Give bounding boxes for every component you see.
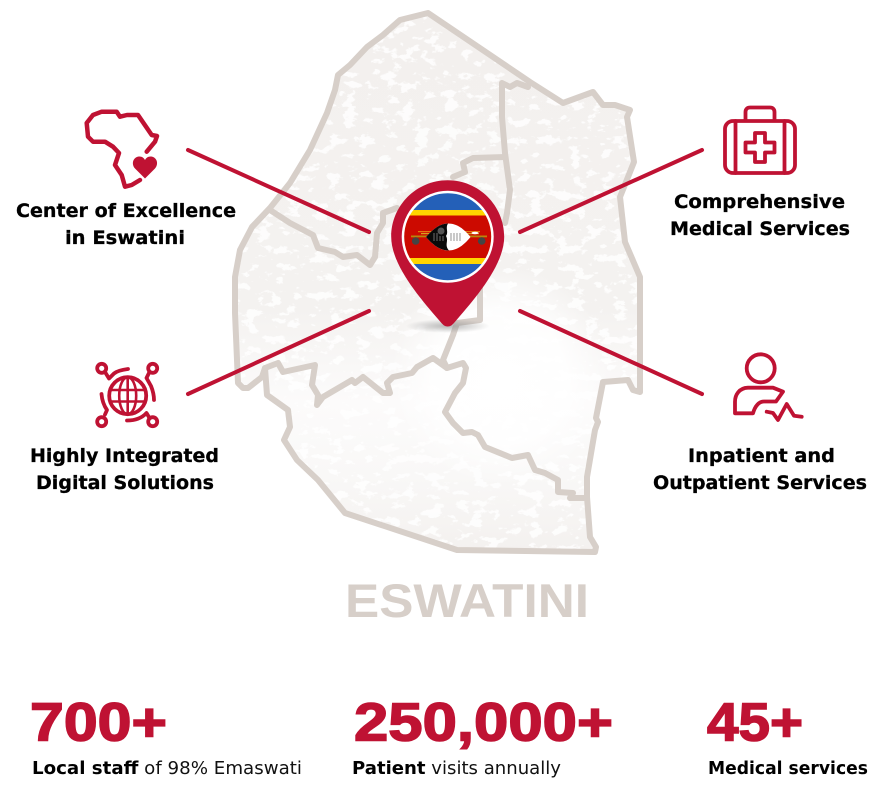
stat: medical services (707, 692, 868, 779)
map pin with flag (391, 180, 504, 326)
stat: local staff (30, 692, 302, 779)
map of Eswatini (225, 5, 650, 560)
label: Comprehensive Medical Services: Comprehensive (674, 191, 845, 213)
stat: local staff: 700+ (30, 692, 167, 752)
icon: digital globe (97, 364, 157, 426)
stat: medical services: Medical services (708, 759, 868, 779)
label: Highly Integrated Digital Solutions: Digital Solutions (36, 472, 214, 494)
map caption: ESWATINI (345, 575, 589, 628)
icon: patient with pulse (735, 354, 802, 420)
icon: Africa with heart (87, 112, 157, 187)
pin shadow (406, 319, 490, 333)
label: Highly Integrated Digital Solutions: Highly Integrated (30, 445, 219, 467)
label: Center of Excellence: in Eswatini (65, 227, 185, 249)
label: Inpatient and Outpatient Services (653, 445, 867, 494)
stat: medical services: 45+ (707, 692, 803, 752)
stat: patient visits (352, 692, 613, 779)
label: Center of Excellence (16, 200, 236, 249)
stat: patient visits: Patient visits annually (352, 759, 561, 779)
label: Center of Excellence: Center of Excellence (16, 200, 236, 222)
stat: local staff: Local staff of 98% Emaswati (32, 759, 302, 779)
stat: patient visits: 250,000+ (354, 692, 613, 752)
label: Inpatient and Outpatient Services: Inpatient and (688, 445, 835, 467)
label: Comprehensive Medical Services: Medical Services (670, 218, 850, 240)
icon: medical kit (725, 108, 795, 173)
connector lines (188, 150, 702, 394)
label: Comprehensive Medical Services (670, 191, 850, 240)
Eswatini flag (404, 193, 492, 280)
label: Inpatient and Outpatient Services: Outpatient Services (653, 472, 867, 494)
label: Highly Integrated Digital Solutions (30, 445, 219, 494)
